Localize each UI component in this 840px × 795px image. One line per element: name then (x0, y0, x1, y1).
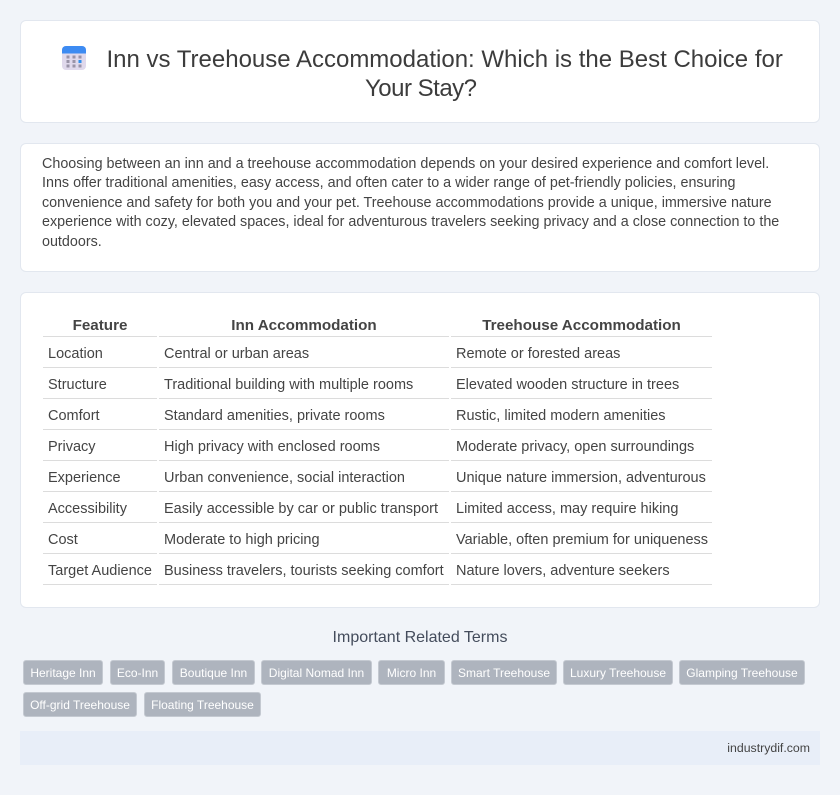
related terms tags: Digital Nomad Inn (269, 666, 364, 680)
related terms tags: Glamping Treehouse (686, 666, 798, 680)
comparison table: Location (48, 346, 103, 362)
comparison table: Elevated wooden structure in trees (456, 377, 679, 393)
comparison table: Structure (48, 377, 107, 393)
intro text: experience with cozy, elevated spaces, ideal for adventurous travelers seeking privacy and a close connection to the (42, 214, 779, 230)
related terms tags: Smart Treehouse (458, 666, 550, 680)
comparison table: Feature (73, 317, 127, 334)
comparison table (43, 317, 712, 585)
title: Inn vs Treehouse Accommodation: Which is the Best Choice for (106, 46, 783, 73)
comparison table: Privacy (48, 439, 96, 455)
comparison table: Inn Accommodation (231, 317, 377, 334)
comparison table: Remote or forested areas (456, 346, 620, 362)
related terms heading: Important Related Terms (333, 629, 507, 646)
comparison table: Unique nature immersion, adventurous (456, 470, 706, 486)
comparison table: Central or urban areas (164, 346, 309, 362)
comparison table: Moderate privacy, open surroundings (456, 439, 694, 455)
comparison table: Business travelers, tourists seeking comfort (164, 563, 444, 579)
intro text: Choosing between an inn and a treehouse accommodation depends on your desired experience and comfort level. (42, 156, 769, 172)
related terms tags: Eco-Inn (117, 666, 158, 680)
comparison table: Experience (48, 470, 121, 486)
comparison table: High privacy with enclosed rooms (164, 439, 380, 455)
related terms tags: Heritage Inn (30, 666, 96, 680)
icon: calendar (62, 46, 86, 70)
comparison table: Nature lovers, adventure seekers (456, 563, 670, 579)
comparison table: Traditional building with multiple rooms (164, 377, 413, 393)
intro text: outdoors. (42, 234, 102, 250)
comparison table: Easily accessible by car or public transport (164, 501, 438, 517)
title: Your Stay? (365, 75, 477, 102)
related terms tags: Floating Treehouse (151, 698, 254, 712)
comparison table: Moderate to high pricing (164, 532, 320, 548)
intro text (42, 156, 779, 250)
comparison table: Comfort (48, 408, 100, 424)
comparison table: Standard amenities, private rooms (164, 408, 385, 424)
comparison table: Cost (48, 532, 78, 548)
comparison table: Rustic, limited modern amenities (456, 408, 666, 424)
panel: comparison table (20, 292, 820, 608)
footer bar (20, 731, 820, 765)
comparison table: Accessibility (48, 501, 127, 517)
related terms tags: Off-grid Treehouse (30, 698, 130, 712)
header panel (20, 20, 820, 123)
footer domain: industrydif.com (727, 741, 810, 755)
comparison table: Urban convenience, social interaction (164, 470, 405, 486)
intro text: Inns offer traditional amenities, easy access, and often cater to a wider range of pet-friendly policies, ensuring (42, 175, 735, 191)
title (106, 46, 783, 102)
intro text: convenience and safety for both you and your pet. Treehouse accommodations provide a unique, immersive nature (42, 195, 772, 211)
related terms tags (23, 660, 805, 717)
comparison table: Variable, often premium for uniqueness (456, 532, 708, 548)
panel: introduction (20, 143, 820, 272)
related terms tags: Micro Inn (387, 666, 436, 680)
comparison table: Target Audience (48, 563, 152, 579)
comparison table: Treehouse Accommodation (482, 317, 681, 334)
related terms tags: Boutique Inn (180, 666, 247, 680)
related terms tags: Luxury Treehouse (570, 666, 666, 680)
comparison table: Limited access, may require hiking (456, 501, 678, 517)
